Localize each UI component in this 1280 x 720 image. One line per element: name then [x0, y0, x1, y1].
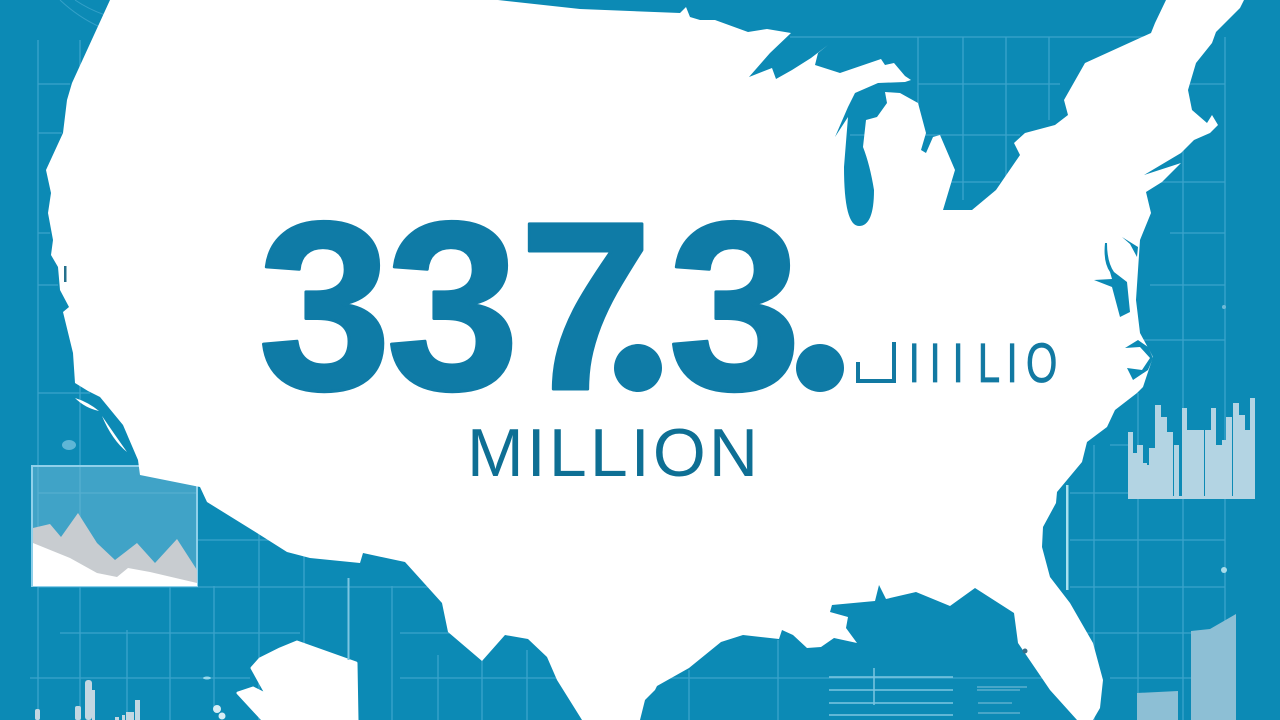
headline number: 3: [668, 172, 801, 440]
million label: MILLION: [467, 415, 758, 491]
decorative arcs top left: [60, 0, 105, 27]
puget sound mark: [64, 266, 66, 282]
alaska silhouette: [238, 642, 357, 720]
bays and inlets on east coast: [1094, 237, 1153, 380]
headline number: [258, 172, 844, 440]
aleutian islets: [213, 705, 226, 720]
headline number: 337: [258, 172, 652, 440]
horizontal table lines: [829, 668, 953, 715]
islands off california: [75, 398, 127, 452]
headline number: .: [798, 243, 842, 422]
garbled small text: IIILIO: [909, 333, 1057, 395]
bar chart right: [1128, 398, 1255, 499]
accents and dots: [62, 305, 1227, 680]
large bars bottom right: [1137, 614, 1236, 720]
area chart panel: [32, 466, 197, 586]
headline number: .: [616, 243, 660, 422]
mini bar chart bottom left: [35, 680, 140, 720]
